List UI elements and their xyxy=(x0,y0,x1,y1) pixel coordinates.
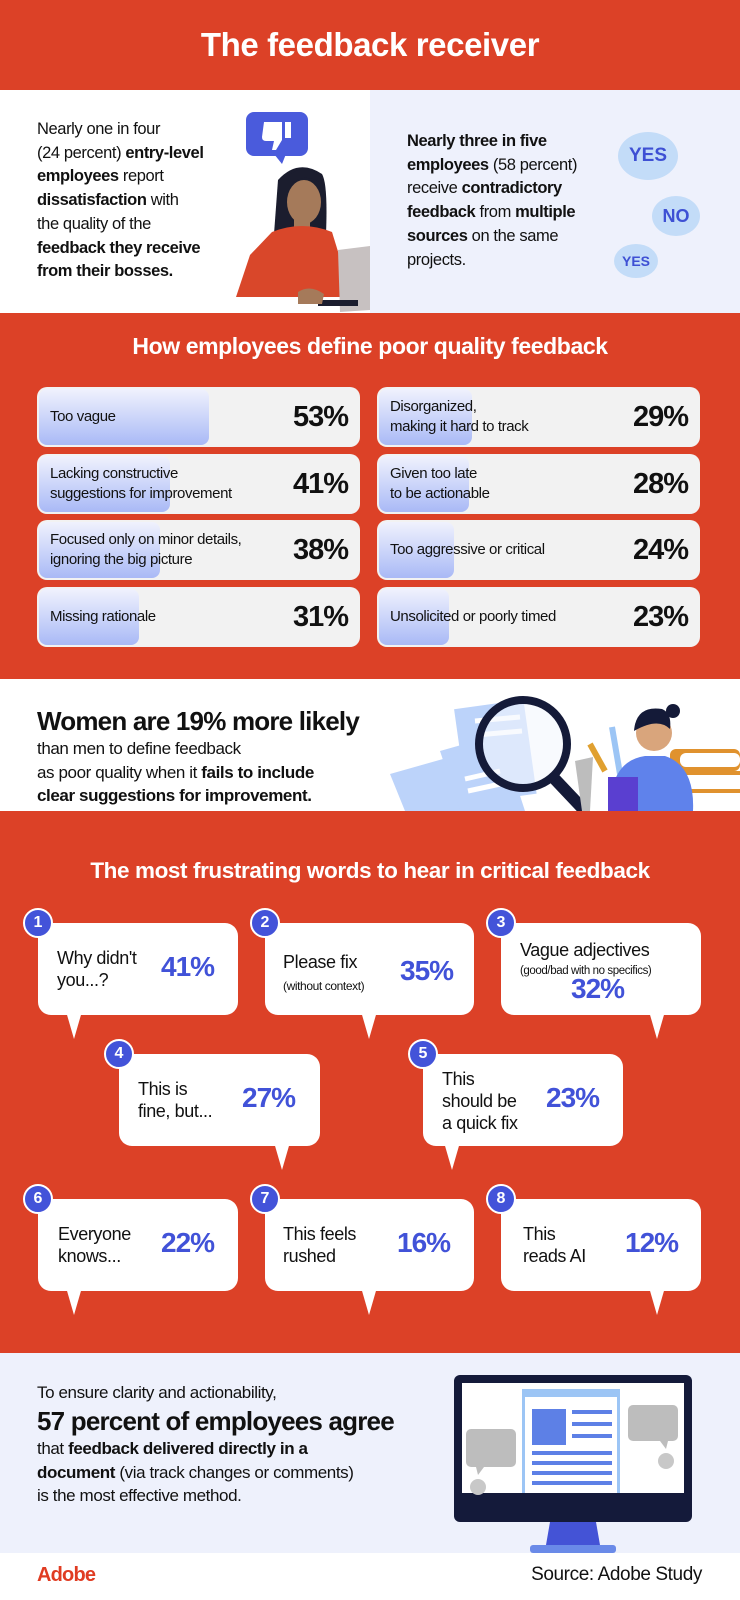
header: title: The feedback receiver xyxy=(201,26,539,63)
icon: YES bubble: YES xyxy=(629,145,667,166)
card: aggressive xyxy=(377,520,700,580)
bubble 8: This xyxy=(523,1224,555,1244)
card: unsolicited: 23% xyxy=(633,600,688,632)
bubble 5: 5 xyxy=(419,1045,427,1062)
panel: contradictory feedback xyxy=(370,90,740,313)
bubble 6: knows... xyxy=(58,1246,121,1266)
text: one in four: feedback they receive xyxy=(37,239,200,257)
card: minor details: 38% xyxy=(293,534,348,566)
text: 57 percent: To ensure clarity and actionability, xyxy=(37,1383,276,1402)
card: aggressive: Too aggressive or critical xyxy=(390,541,545,558)
card: disorganized: Disorganized, xyxy=(390,398,477,415)
card: aggressive: 24% xyxy=(633,534,688,566)
text: women 19%: than men to define feedback xyxy=(37,739,241,758)
text: women 19%: clear suggestions for improvement. xyxy=(37,786,312,805)
text: 57 percent: document (via track changes or comments) xyxy=(37,1462,354,1482)
text: three in five: projects. xyxy=(407,251,466,269)
bubble 4: 4 xyxy=(115,1045,123,1062)
bubble 2: 2 xyxy=(261,914,269,931)
card: too vague: Too vague xyxy=(50,408,116,425)
bubble 5 xyxy=(408,1039,623,1170)
text: 57 percent: 57 percent of employees agree xyxy=(37,1406,394,1436)
card: unsolicited: Unsolicited or poorly timed xyxy=(390,608,556,625)
card: missing rationale: Missing rationale xyxy=(50,608,156,625)
bubble 8: reads AI xyxy=(523,1246,586,1266)
text: one in four: the quality of the xyxy=(37,215,151,233)
panel: poor quality feedback xyxy=(0,313,740,679)
text: one in four: (24 percent) entry-level xyxy=(37,144,204,162)
card: disorganized: 29% xyxy=(633,400,688,432)
card: lacking constructive: 41% xyxy=(293,468,348,500)
bubble 2: (without context) xyxy=(283,979,364,993)
text: one in four: Nearly one in four xyxy=(37,120,160,138)
card: missing rationale: 31% xyxy=(293,600,348,632)
bubble 2 xyxy=(250,908,474,1039)
text: 57 percent: that feedback delivered directly in a xyxy=(37,1439,308,1458)
bubble 2: 35% xyxy=(400,955,453,986)
bubble 3: 3 xyxy=(497,914,505,931)
text: three in five: Nearly three in five xyxy=(407,132,547,150)
card: minor details: ignoring the big picture xyxy=(50,551,192,568)
card: too late: to be actionable xyxy=(390,485,490,502)
bubble 1: you...? xyxy=(57,970,108,990)
bubble 6: 6 xyxy=(34,1190,42,1207)
panel: entry-level dissatisfaction xyxy=(0,90,370,313)
bubble 6 xyxy=(23,1184,238,1315)
text: three in five xyxy=(407,132,577,269)
bubble 2: Please fix xyxy=(283,952,357,972)
bubble 3 xyxy=(486,908,701,1039)
panel: document feedback xyxy=(0,1353,740,1553)
card: lacking constructive: Lacking constructive xyxy=(50,465,178,482)
text: one in four: from their bosses. xyxy=(37,262,173,280)
icon: YES bubble small xyxy=(614,244,658,278)
bubble 8 xyxy=(486,1184,701,1315)
illustration: monitor xyxy=(454,1375,692,1553)
text: 57 percent: is the most effective method. xyxy=(37,1486,241,1505)
text: one in four: dissatisfaction with xyxy=(37,191,178,209)
icon: thumbs down bubble xyxy=(246,112,308,164)
bubble 3: (good/bad with no specifics) xyxy=(520,965,651,977)
bubble 4: 27% xyxy=(242,1082,295,1113)
header: title xyxy=(0,0,740,90)
panel: frustrating words xyxy=(0,811,740,1353)
text: women 19%: Women are 19% more likely xyxy=(37,706,359,736)
bubble 3: 32% xyxy=(571,973,624,1004)
text: women 19% xyxy=(37,706,360,805)
bubble 7 xyxy=(250,1184,474,1315)
bubble 1: Why didn't xyxy=(57,948,136,968)
card: minor details: Focused only on minor details, xyxy=(50,531,241,548)
card: lacking constructive: suggestions for improvement xyxy=(50,485,232,502)
icon: YES bubble small: YES xyxy=(622,253,650,269)
bubble 5: 23% xyxy=(546,1082,599,1113)
heading: How employees define poor quality feedback xyxy=(132,333,608,359)
bubble 5: This xyxy=(442,1069,474,1089)
icon: YES bubble xyxy=(618,132,678,180)
illustration: woman at laptop xyxy=(236,167,370,312)
illustration: magnifier and woman xyxy=(390,696,740,811)
bubble 4: This is xyxy=(138,1079,187,1099)
bubble 4: fine, but... xyxy=(138,1101,212,1121)
bubble 8: 8 xyxy=(497,1190,505,1207)
bubble 4 xyxy=(104,1039,320,1170)
text: one in four: employees report xyxy=(37,167,164,185)
card: too vague xyxy=(37,387,360,447)
bubble 6: Everyone xyxy=(58,1224,131,1244)
bubble 7: rushed xyxy=(283,1246,336,1266)
card: too vague: 53% xyxy=(293,400,348,432)
card: disorganized xyxy=(377,387,700,447)
bubble 1 xyxy=(23,908,238,1039)
text: three in five: employees (58 percent) xyxy=(407,156,577,174)
bubble 7: 7 xyxy=(261,1190,269,1207)
footer: source: Source: Adobe Study xyxy=(531,1564,702,1585)
icon: NO bubble xyxy=(652,196,700,236)
card: too late: 28% xyxy=(633,468,688,500)
text: one in four xyxy=(37,120,204,280)
bubble 3: Vague adjectives xyxy=(520,940,649,960)
heading: The most frustrating words to hear in critical feedback xyxy=(90,858,650,883)
card: too late: Given too late xyxy=(390,465,477,482)
bubble 5: should be xyxy=(442,1091,516,1111)
text: women 19%: as poor quality when it fails to include xyxy=(37,762,314,782)
panel: women stat xyxy=(0,679,740,811)
card: too late xyxy=(377,454,700,514)
card: unsolicited xyxy=(377,587,700,647)
bubble 5: a quick fix xyxy=(442,1113,518,1133)
bubble 1: 41% xyxy=(161,951,214,982)
footer: Adobe logo: Adobe xyxy=(37,1564,95,1586)
card: disorganized: making it hard to track xyxy=(390,418,528,435)
text: 57 percent xyxy=(37,1383,394,1505)
card: lacking constructive xyxy=(37,454,360,514)
bubble 7: This feels xyxy=(283,1224,356,1244)
card: missing rationale xyxy=(37,587,360,647)
text: three in five: receive contradictory xyxy=(407,179,562,197)
bubble 8: 12% xyxy=(625,1227,678,1258)
icon: NO bubble: NO xyxy=(662,206,690,226)
bubble 6: 22% xyxy=(161,1227,214,1258)
text: three in five: feedback from multiple xyxy=(407,203,575,221)
bubble 1: 1 xyxy=(34,914,42,931)
card: minor details xyxy=(37,520,360,580)
bubble 7: 16% xyxy=(397,1227,450,1258)
text: three in five: sources on the same xyxy=(407,227,558,245)
